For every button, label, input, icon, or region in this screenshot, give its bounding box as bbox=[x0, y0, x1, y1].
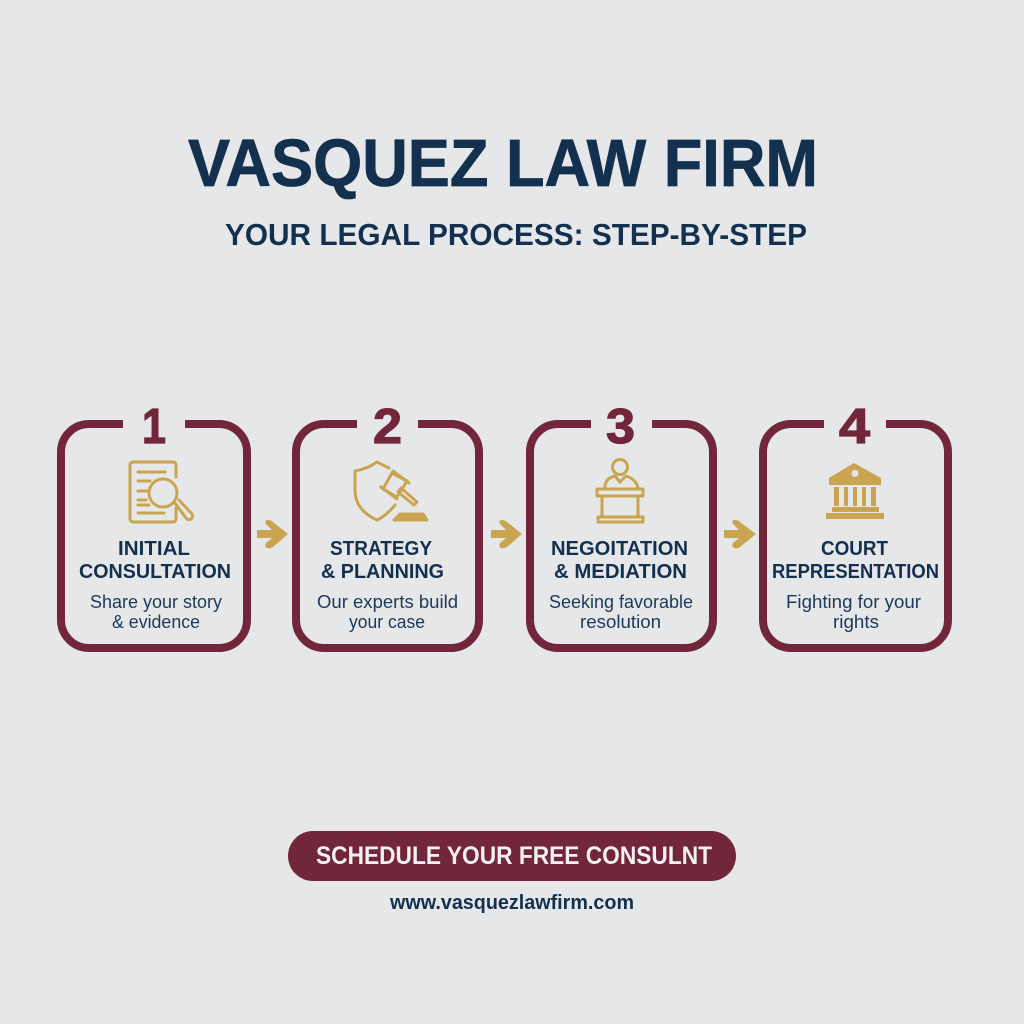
panel: step 3 negotiation and mediation: resolution bbox=[580, 612, 661, 632]
heading: INITIAL bbox=[118, 538, 190, 560]
step number 1: 1 bbox=[142, 400, 166, 454]
panel: step 2 strategy and planning bbox=[296, 400, 479, 648]
arrow 2 bbox=[491, 520, 522, 548]
card outline 1 bbox=[61, 424, 247, 648]
description: Fighting for your bbox=[786, 592, 921, 612]
heading: COURT bbox=[821, 538, 888, 560]
icon: courthouse bbox=[826, 463, 884, 519]
heading: STRATEGY bbox=[330, 538, 433, 560]
heading: NEGOITATION bbox=[551, 538, 688, 560]
description: Our experts build bbox=[317, 592, 458, 612]
arrow 3 bbox=[724, 520, 756, 548]
subtitle: YOUR LEGAL PROCESS: STEP-BY-STEP bbox=[225, 217, 807, 252]
card outline 4 bbox=[763, 424, 948, 648]
description: Share your story bbox=[90, 592, 222, 612]
icon: speaker at podium bbox=[597, 460, 643, 522]
card outline 2 bbox=[296, 424, 479, 648]
arrow 1 bbox=[257, 520, 288, 548]
panel: step 3 negotiation and mediation bbox=[530, 400, 713, 648]
card outline 3 bbox=[530, 424, 713, 648]
call to action button: SCHEDULE YOUR FREE CONSULNT bbox=[316, 842, 712, 870]
icon: shield and gavel bbox=[355, 462, 427, 520]
panel: step 1 initial consultation bbox=[61, 400, 247, 648]
panel: step 4 court representation bbox=[763, 400, 948, 648]
title: VASQUEZ LAW FIRM bbox=[188, 126, 818, 201]
website url: www.vasquezlawfirm.com bbox=[389, 892, 634, 914]
step number 3: 3 bbox=[606, 400, 635, 454]
panel: step 2 strategy and planning: & PLANNING bbox=[321, 561, 444, 583]
step number 2: 2 bbox=[373, 400, 402, 454]
panel: step 3 negotiation and mediation: & MEDIATION bbox=[554, 561, 687, 583]
panel: step 4 court representation: REPRESENTATION bbox=[772, 561, 939, 583]
call to action button bbox=[288, 831, 736, 881]
description: Seeking favorable bbox=[549, 592, 693, 612]
panel: step 1 initial consultation: CONSULTATION bbox=[79, 561, 231, 583]
panel: step 2 strategy and planning: your case bbox=[349, 612, 425, 632]
icon: document with magnifying glass bbox=[130, 462, 193, 522]
step number 4: 4 bbox=[839, 400, 870, 454]
panel: step 1 initial consultation: & evidence bbox=[112, 612, 200, 632]
panel: step 4 court representation: rights bbox=[833, 612, 879, 632]
